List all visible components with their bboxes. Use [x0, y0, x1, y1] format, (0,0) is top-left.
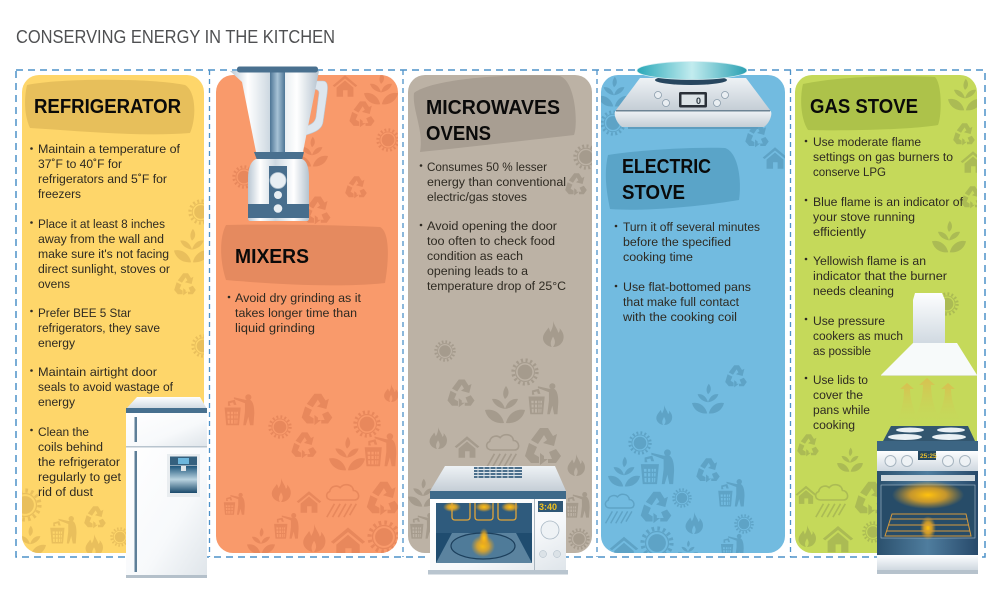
- text: gas stove tips: cooking: [813, 418, 855, 432]
- text: refrigerator tips: refrigerators and 5˚F for: [38, 172, 167, 186]
- text: refrigerator tips: [30, 142, 181, 499]
- text: electric stove tips: before the specified: [623, 235, 731, 249]
- text: refrigerator tips: direct sunlight, stoves or: [38, 262, 170, 276]
- text: electric stove tips: [615, 220, 760, 324]
- text: refrigerator tips: rid of dust: [38, 485, 94, 499]
- heading tab: mixers: [221, 225, 388, 285]
- panel: mixers background: [216, 73, 399, 557]
- heading: mixers: MIXERS: [235, 246, 309, 268]
- text: refrigerator tips: coils behind: [38, 440, 103, 454]
- text: gas stove tips: Use pressure: [813, 314, 885, 328]
- title: CONSERVING ENERGY IN THE KITCHEN: [16, 27, 335, 47]
- heading: electric stove: STOVE: [622, 182, 685, 204]
- text: gas stove tips: settings on gas burners to: [813, 150, 953, 164]
- heading: microwaves ovens: OVENS: [426, 123, 491, 145]
- text: gas stove tips: [805, 135, 964, 432]
- text: refrigerator tips: Maintain a temperature of: [38, 142, 181, 156]
- text: microwave tips: condition as each: [427, 249, 523, 263]
- text: gas stove tips: conserve LPG: [813, 165, 886, 179]
- text: electric stove tips: cooking time: [623, 250, 693, 264]
- heading: refrigerator: REFRIGERATOR: [34, 96, 182, 118]
- text: mixers tips: [228, 291, 362, 335]
- text: microwave tips: [420, 160, 566, 293]
- panel: gas stove background: [795, 75, 985, 553]
- text: electric stove tips: that make full contact: [623, 295, 740, 309]
- text: gas stove tips: needs cleaning: [813, 284, 894, 298]
- heading tab: microwaves ovens: [414, 75, 576, 152]
- text: gas stove tips: pans while: [813, 403, 870, 417]
- text: gas stove tips: cover the: [813, 388, 863, 402]
- icon: microwave oven: 3:40: [539, 502, 557, 512]
- text: refrigerator tips: Place it at least 8 inches: [38, 217, 165, 231]
- text: microwave tips: Avoid opening the door: [427, 219, 557, 233]
- text: electric stove tips: with the cooking coil: [622, 310, 737, 324]
- text: gas stove tips: Blue flame is an indicator of: [813, 195, 964, 209]
- icon: electric stove: [615, 62, 771, 129]
- text: refrigerator tips: 37˚F to 40˚F for: [38, 157, 122, 171]
- icon: gas stove oven: 25:25: [920, 453, 937, 460]
- text: refrigerator tips: energy: [38, 336, 76, 350]
- text: microwave tips: electric/gas stoves: [427, 190, 527, 204]
- icon: gas stove oven: [877, 426, 978, 574]
- heading: electric stove: [622, 156, 711, 204]
- heading: electric stove: ELECTRIC: [622, 156, 711, 178]
- text: microwave tips: Consumes 50 % lesser: [427, 160, 547, 174]
- text: gas stove tips: Yellowish flame is an: [813, 254, 926, 268]
- text: gas stove tips: as possible: [813, 344, 871, 358]
- text: microwave tips: energy than conventional: [427, 175, 566, 189]
- text: microwave tips: temperature drop of 25°C: [427, 279, 566, 293]
- text: refrigerator tips: make sure it's not facing: [38, 247, 169, 261]
- text: mixers tips: takes longer time than: [235, 306, 357, 320]
- text: refrigerator tips: ovens: [38, 277, 70, 291]
- text: refrigerator tips: the refrigerator: [38, 455, 120, 469]
- text: gas stove tips: your stove running: [813, 210, 915, 224]
- text: refrigerator tips: regularly to get: [38, 470, 122, 484]
- icon: refrigerator: [126, 397, 207, 578]
- text: mixers tips: Avoid dry grinding as it: [235, 291, 362, 305]
- text: refrigerator tips: away from the wall and: [38, 232, 164, 246]
- icon: rising heat arrows: [895, 378, 963, 424]
- text: electric stove tips: Turn it off several minutes: [623, 220, 760, 234]
- text: refrigerator tips: Maintain airtight door: [38, 365, 157, 379]
- dashed frame: [16, 70, 985, 557]
- heading: microwaves ovens: [426, 97, 560, 145]
- icon: electric stove: 0: [696, 96, 701, 106]
- heading tab: electric stove: [606, 148, 740, 210]
- text: refrigerator tips: Prefer BEE 5 Star: [38, 306, 131, 320]
- text: microwave tips: too often to check food: [427, 234, 555, 248]
- text: refrigerator tips: refrigerators, they save: [38, 321, 160, 335]
- heading tab: refrigerator: [25, 80, 194, 134]
- text: refrigerator tips: energy: [38, 395, 76, 409]
- text: refrigerator tips: Clean the: [38, 425, 89, 439]
- icon: microwave oven: [428, 466, 568, 574]
- heading: gas stove: GAS STOVE: [810, 96, 918, 118]
- text: microwave tips: opening leads to a: [427, 264, 528, 278]
- text: refrigerator tips: seals to avoid wastage of: [38, 380, 174, 394]
- text: gas stove tips: Use moderate flame: [813, 135, 921, 149]
- panel: microwave background: [408, 75, 597, 553]
- panel: refrigerator background: [22, 75, 204, 553]
- text: electric stove tips: Use flat-bottomed pans: [623, 280, 751, 294]
- heading: microwaves ovens: MICROWAVES: [426, 97, 560, 119]
- text: refrigerator tips: freezers: [38, 187, 81, 201]
- text: mixers tips: liquid grinding: [235, 321, 315, 335]
- icon: range hood: [881, 293, 977, 376]
- panel: electric stove background: [598, 75, 787, 562]
- text: gas stove tips: efficiently: [813, 225, 867, 239]
- text: gas stove tips: Use lids to: [813, 373, 868, 387]
- icon: blender: [230, 66, 328, 221]
- text: gas stove tips: cookers as much: [813, 329, 903, 343]
- text: gas stove tips: indicator that the burner: [813, 269, 947, 283]
- heading tab: gas stove: [801, 76, 941, 130]
